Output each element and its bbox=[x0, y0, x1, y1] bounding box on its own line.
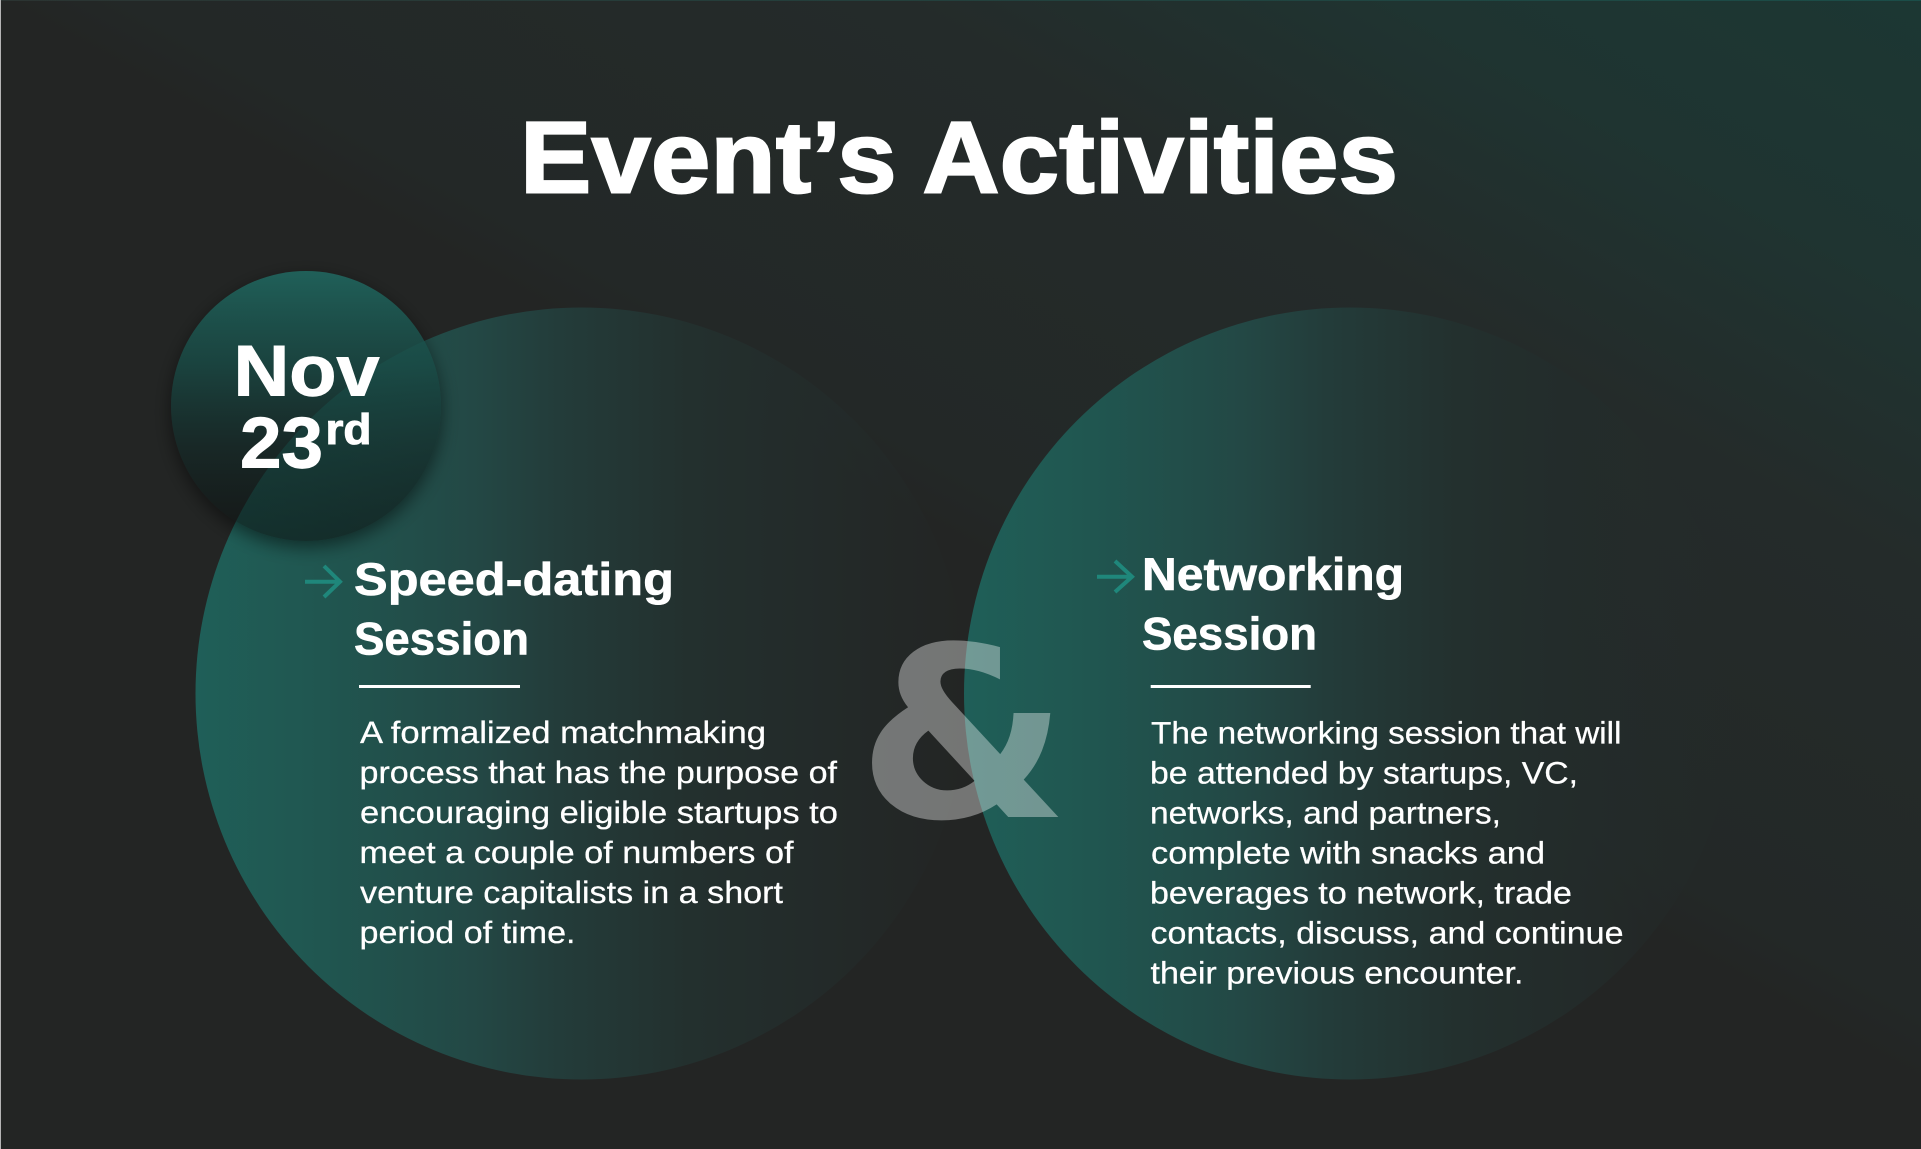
heading: speed-dating session bbox=[354, 553, 674, 664]
panel: speed-dating circle bbox=[196, 308, 968, 1080]
text block: speed-dating description: A formalized matchmaking bbox=[360, 715, 766, 750]
text block: speed-dating description: meet a couple of numbers of bbox=[360, 835, 794, 870]
text block: networking description: be attended by startups, VC, bbox=[1150, 755, 1578, 790]
text block: speed-dating description bbox=[360, 715, 838, 950]
date badge: Nov bbox=[234, 332, 380, 412]
text block: speed-dating description: venture capitalists in a short bbox=[360, 875, 783, 910]
text block: networking description: contacts, discuss, and continue bbox=[1150, 915, 1624, 950]
text block: networking description: their previous encounter. bbox=[1150, 955, 1524, 990]
heading: speed-dating session: Session bbox=[354, 612, 529, 664]
text block: networking description: networks, and partners, bbox=[1150, 795, 1501, 830]
text block: speed-dating description: period of time. bbox=[360, 915, 576, 950]
date badge: 23 bbox=[240, 404, 323, 484]
date badge: rd bbox=[326, 406, 372, 454]
text block: networking description: beverages to network, trade bbox=[1150, 875, 1572, 910]
text block: speed-dating description: process that has the purpose of bbox=[360, 755, 837, 790]
heading: networking session: Session bbox=[1142, 607, 1317, 659]
date badge bbox=[171, 271, 441, 541]
text block: networking description: The networking session that will bbox=[1151, 715, 1622, 750]
panel: networking circle bbox=[964, 308, 1736, 1080]
text block: networking description bbox=[1150, 715, 1624, 990]
ampersand: & bbox=[858, 597, 1068, 874]
icon: arrow bbox=[1097, 561, 1132, 592]
heading: networking session: Networking bbox=[1142, 548, 1404, 600]
heading: networking session bbox=[1142, 548, 1404, 659]
text block: speed-dating description: encouraging eligible startups to bbox=[360, 795, 838, 830]
divider bbox=[1151, 685, 1311, 688]
title: Event’s Activities bbox=[520, 101, 1398, 215]
text block: networking description: complete with snacks and bbox=[1151, 835, 1545, 870]
panel content: speed-dating session bbox=[305, 553, 838, 950]
heading: speed-dating session: Speed-dating bbox=[354, 553, 674, 605]
icon: arrow bbox=[305, 566, 340, 597]
divider bbox=[359, 685, 520, 688]
panel content: networking session bbox=[1097, 548, 1624, 990]
